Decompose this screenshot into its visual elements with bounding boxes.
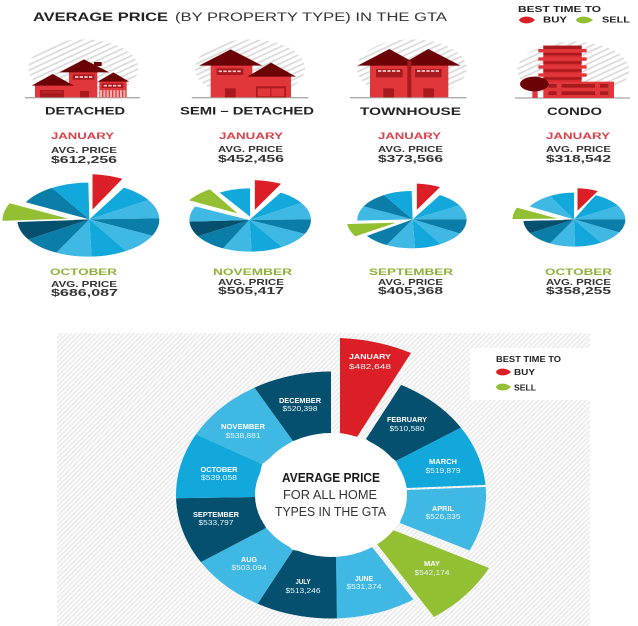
column: condo labels: $318,542 [546, 154, 612, 165]
pie chart: condo [512, 188, 626, 247]
column: condo labels: CONDO [547, 106, 603, 118]
slice: buy, red [254, 179, 283, 212]
column: semi-detached labels: SEMI – DETACHED [180, 106, 314, 118]
legend: best time to buy or sell [518, 5, 630, 24]
column: condo labels: JANUARY [546, 131, 611, 142]
segment: April: $526,335 [426, 512, 460, 521]
donut centre text: FOR ALL HOME [283, 488, 377, 502]
pie month: detached sell: OCTOBER [50, 267, 117, 278]
pie month: townhouse sell: SEPTEMBER [369, 267, 453, 278]
segment: June: $531,374 [346, 582, 382, 591]
pie month: semi-detached sell [213, 267, 292, 297]
segment: November [196, 388, 293, 464]
segment: April: APRIL [432, 504, 454, 513]
column: semi-detached labels: AVG. PRICE [218, 144, 283, 154]
column: detached labels [45, 106, 125, 166]
pie month: detached sell: $686,087 [51, 288, 119, 299]
slice: sell, green [346, 222, 402, 237]
panel: hatched background [57, 333, 590, 626]
icon: townhouse [350, 39, 467, 98]
segment: December [254, 372, 331, 441]
pie month: condo sell: $358,255 [546, 286, 612, 297]
donut chart: average price by month [176, 338, 489, 618]
pie chart: semi-detached [189, 180, 311, 252]
pie month: condo sell: OCTOBER [545, 267, 612, 278]
column: detached labels: $612,256 [51, 155, 118, 166]
column: condo labels: AVG. PRICE [546, 144, 611, 154]
donut centre text: AVERAGE PRICE [282, 471, 380, 485]
legend: best time to buy or sell: SELL [602, 16, 630, 24]
segment: May: MAY [424, 559, 440, 568]
segment: October: $539,058 [201, 473, 237, 482]
pie chart: detached [2, 174, 160, 257]
pie month: semi-detached sell: AVG. PRICE [218, 277, 284, 287]
slice: sell, green [2, 202, 74, 222]
pie month: townhouse sell: $405,368 [378, 286, 444, 297]
slice: sell, green [187, 188, 241, 215]
segment: February [366, 384, 461, 461]
column: semi-detached labels: $452,456 [218, 154, 285, 165]
segment: January: $482,648 [349, 362, 391, 371]
pie month: semi-detached sell: $505,417 [218, 286, 285, 297]
title [33, 12, 447, 24]
slice: buy, red [92, 173, 124, 212]
segment: November: $538,881 [226, 431, 260, 440]
title: AVERAGE PRICE [33, 12, 168, 24]
pie month: condo sell [545, 267, 612, 297]
column: semi-detached labels [180, 106, 314, 165]
slice: buy, red [416, 183, 442, 212]
legend box: best time to [470, 348, 590, 400]
slice: sell, green [512, 207, 563, 220]
column: detached labels: DETACHED [45, 106, 125, 118]
icon: semi-detached house [192, 39, 308, 98]
column: townhouse labels: $373,566 [378, 154, 444, 165]
segment: September [176, 497, 266, 562]
segment: July: $513,246 [286, 586, 320, 595]
segment: August [200, 528, 293, 604]
segment: November: NOVEMBER [221, 422, 266, 431]
segment: August: $503,094 [232, 563, 266, 572]
pie month: townhouse sell: AVG. PRICE [378, 277, 443, 287]
legend box: best time to: BUY [514, 368, 536, 377]
column: condo labels [546, 106, 612, 165]
segment: April [400, 486, 486, 550]
column: townhouse labels [360, 106, 461, 165]
legend: best time to buy or sell: BUY [543, 16, 568, 24]
pie month: townhouse sell [369, 267, 453, 297]
pie month: condo sell: AVG. PRICE [546, 277, 611, 287]
segment: May [377, 530, 489, 617]
segment: March: $519,879 [426, 466, 460, 475]
title: (BY PROPERTY TYPE) IN THE GTA [175, 12, 447, 24]
segment: July [258, 550, 337, 618]
column: townhouse labels: JANUARY [378, 131, 442, 142]
icon: condo [515, 42, 630, 99]
pie chart: townhouse [347, 184, 467, 248]
icon: detached house [25, 39, 140, 98]
pie month: detached sell: AVG. PRICE [51, 279, 117, 289]
segment: August: AUG [241, 555, 257, 564]
segment: July: JULY [296, 577, 310, 586]
column: detached labels: AVG. PRICE [51, 145, 117, 155]
segment: September: SEPTEMBER [193, 510, 240, 519]
legend: best time to buy or sell: BEST TIME TO [518, 5, 601, 14]
segment: September: $533,797 [198, 518, 234, 527]
segment: February: $510,580 [390, 424, 424, 433]
segment: February: FEBRUARY [387, 415, 427, 424]
column: detached labels: JANUARY [51, 131, 115, 142]
segment: June [336, 547, 414, 618]
segment: December: $520,398 [282, 404, 318, 413]
segment: June: JUNE [355, 574, 373, 583]
segment: October: OCTOBER [200, 465, 238, 474]
column: semi-detached labels: JANUARY [219, 131, 284, 142]
segment: January [340, 338, 411, 437]
pie month: semi-detached sell: NOVEMBER [213, 267, 292, 278]
donut centre text: TYPES IN THE GTA [275, 505, 387, 519]
segment: January: JANUARY [349, 352, 391, 361]
pie month: detached sell [50, 267, 119, 299]
legend box: best time to: SELL [514, 384, 536, 392]
slice: buy, red [577, 187, 599, 213]
legend box: best time to: BEST TIME TO [496, 355, 561, 364]
segment: December: DECEMBER [279, 396, 322, 405]
segment: March: MARCH [429, 457, 457, 466]
segment: October [176, 434, 262, 498]
column: townhouse labels: AVG. PRICE [378, 144, 443, 154]
column: townhouse labels: TOWNHOUSE [360, 106, 461, 118]
segment: May: $542,174 [414, 568, 450, 577]
donut centre text [255, 433, 407, 557]
segment: March [396, 428, 486, 488]
